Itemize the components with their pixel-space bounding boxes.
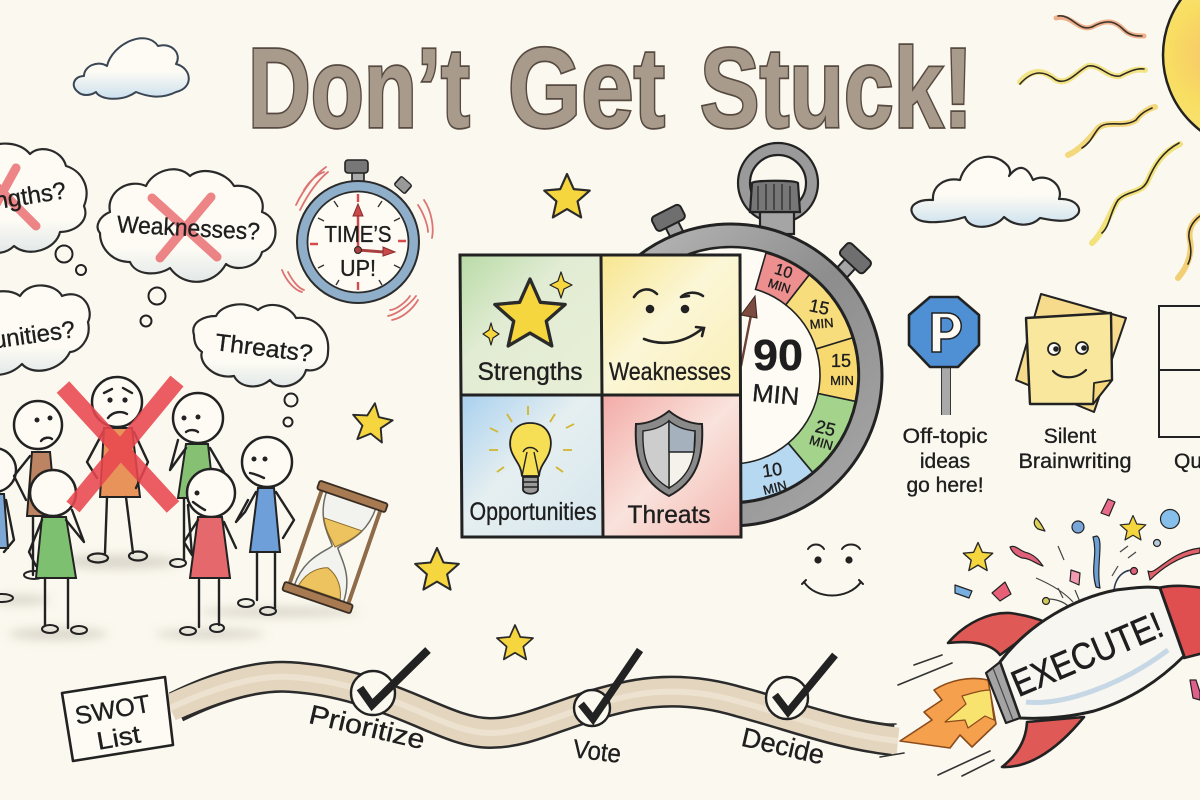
dial ring [302, 186, 414, 298]
cloud: top left [74, 38, 189, 99]
ground shadows [0, 555, 360, 640]
title: Stuck! [700, 25, 973, 151]
quadrant: Strengths [460, 255, 601, 395]
parking sign icon [909, 297, 979, 415]
flame [900, 678, 996, 748]
segment labels: 15 [807, 295, 831, 319]
sun rays [1020, 16, 1200, 278]
red cross [0, 168, 36, 226]
segment labels: MIN [808, 432, 835, 453]
star [963, 542, 993, 571]
milestone: Vote [571, 650, 640, 769]
shake marks [282, 167, 433, 320]
star icon [495, 279, 565, 346]
star [350, 400, 395, 444]
label: EXECUTE! [1005, 604, 1169, 705]
top ring [744, 149, 812, 217]
smiley face [802, 544, 863, 596]
shield icon [636, 411, 702, 496]
segment labels: 10 [761, 459, 783, 481]
star [497, 625, 533, 659]
thought bubbles [56, 246, 298, 426]
segment labels: MIN [766, 276, 792, 296]
group of stick people [0, 377, 294, 635]
segment: 10 min blue [709, 443, 813, 502]
label: Weaknesses? [116, 211, 261, 246]
segment: 10 min red [756, 253, 809, 305]
confetti burst [955, 499, 1200, 700]
quadrant: Threats [601, 395, 740, 537]
frame [289, 490, 381, 604]
sun disc [1163, 0, 1200, 150]
title: Get [508, 25, 665, 151]
main stopwatch: 90 minute timer [580, 143, 882, 526]
thought cloud: Opportunities [0, 285, 90, 375]
hands [357, 206, 359, 250]
label: Opportunities [470, 498, 596, 526]
nozzle [986, 662, 1020, 723]
label: off-topic ideas: go here! [906, 474, 984, 497]
case [591, 235, 871, 515]
small stopwatch: Time's Up [282, 160, 433, 320]
star [544, 174, 590, 217]
label: Threats? [214, 329, 314, 368]
label: silent brainwriting: Brainwriting [1018, 450, 1132, 473]
segment labels [761, 261, 854, 498]
quadrant grid icon (cropped) [1159, 306, 1200, 437]
star [1120, 516, 1146, 540]
right button [826, 241, 873, 288]
segment labels: 25 [813, 416, 838, 440]
grid lines [460, 255, 741, 537]
segment: 15 min yellow [816, 338, 858, 401]
star [415, 548, 459, 590]
person: brown shirt [14, 401, 62, 579]
person: blue shirt [236, 437, 294, 615]
label: Threats [628, 501, 710, 529]
label: off-topic ideas: ideas [920, 450, 970, 473]
segment: 15 min yellow [786, 275, 852, 349]
person: green shirt, thinking [170, 393, 224, 567]
red cross over the group [63, 381, 177, 507]
label: Strengths [478, 358, 582, 386]
SWOT List box: List [95, 721, 143, 756]
sticky notes icon [1016, 294, 1126, 412]
label: Weaknesses [609, 358, 731, 386]
person: orange shirt, crossed out [87, 377, 148, 562]
SWOT matrix [460, 255, 741, 537]
milestone: Prioritize [306, 650, 428, 755]
segment labels: MIN [809, 315, 834, 332]
label: off-topic ideas: Off-topic [902, 425, 988, 448]
SWOT List box [62, 677, 173, 761]
person: red shirt [180, 469, 236, 635]
progress road [170, 677, 898, 741]
glass [294, 491, 376, 603]
milestone: Prioritize: Prioritize [306, 699, 428, 755]
label: silent brainwriting: Silent [1044, 425, 1096, 448]
light bulb icon [489, 406, 574, 494]
speed lines [880, 655, 994, 776]
title [248, 25, 973, 151]
segment labels: MIN [762, 477, 788, 498]
crown [760, 212, 794, 234]
segment labels: 10 [772, 261, 795, 283]
thought cloud: Weaknesses [98, 169, 276, 282]
centre label: 90 [753, 331, 803, 380]
milestone: Decide: Decide [739, 722, 827, 770]
person: green shirt, front [29, 470, 87, 634]
segment labels: 15 [831, 351, 851, 371]
crown [352, 172, 364, 182]
body [1000, 587, 1184, 718]
nose [1158, 586, 1200, 658]
thought cloud: Threats [193, 304, 328, 386]
sun [1020, 0, 1200, 278]
rocket [880, 586, 1200, 776]
fin bottom [1002, 717, 1084, 767]
segment: 25 min green [788, 394, 855, 472]
SWOT List box: SWOT [73, 690, 152, 731]
quadrant: Weaknesses [601, 255, 740, 395]
segment labels: MIN [830, 373, 854, 388]
thought cloud: Strengths [0, 144, 87, 253]
label: TIME’S [324, 221, 392, 247]
fin top [948, 613, 1045, 655]
smirk face [634, 289, 704, 343]
hourglass [282, 480, 388, 614]
milestone: Vote: Vote [571, 733, 623, 769]
quadrant: Opportunities [460, 395, 601, 537]
side button [394, 176, 412, 194]
person: far left edge [0, 448, 16, 602]
ticks [310, 194, 406, 290]
sparkles [483, 272, 572, 345]
main stopwatch: 90 minute timer: MIN [751, 379, 800, 411]
milestone: Decide [739, 655, 835, 770]
cloud: top right [911, 157, 1079, 227]
left button [650, 203, 694, 248]
sand [316, 518, 362, 554]
needle [741, 300, 754, 366]
face [1048, 343, 1060, 355]
title: Don’t [248, 25, 470, 151]
small stopwatch: Time's Up: UP! [340, 255, 376, 281]
red cross [152, 197, 217, 258]
